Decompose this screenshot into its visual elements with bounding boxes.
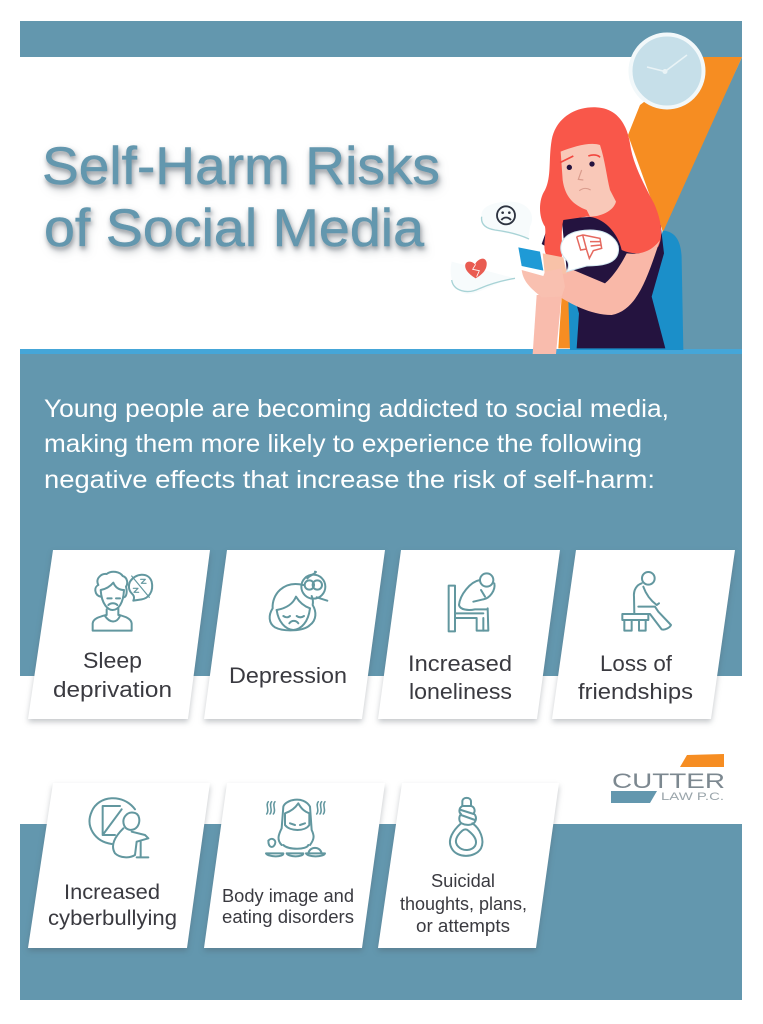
header panel: white: [20, 57, 742, 350]
logo: Cutter Law P.C.: CUTTER: [612, 770, 725, 793]
thumbs down icon: [577, 235, 602, 258]
label: Increased: [408, 651, 512, 676]
label: Sleep: [83, 648, 142, 673]
card: increased cyberbullying: [28, 783, 210, 948]
card: body image and eating disorders: [204, 783, 385, 948]
card: sleep deprivation: [28, 550, 210, 719]
label: thoughts, plans,: [400, 894, 527, 914]
card: loss of friendships: [552, 550, 735, 719]
label: [400, 871, 527, 936]
illustration: sad girl with phone: [451, 107, 683, 354]
label: cyberbullying: [48, 907, 177, 930]
logo: Cutter Law P.C.: [611, 754, 725, 803]
eyes: [567, 165, 572, 170]
intro paragraph: [44, 395, 669, 494]
icon: noose: [450, 798, 482, 856]
card: depression: [204, 550, 385, 719]
label: deprivation: [53, 677, 172, 702]
icon: person hunched on chair: [449, 573, 495, 631]
title: [42, 137, 440, 258]
icon: person sitting on bench: [622, 572, 671, 631]
header right teal background: [640, 57, 742, 350]
title: of Social Media: [44, 199, 425, 258]
wrist behind phone: [543, 253, 567, 277]
icon: child with phone: [90, 798, 148, 857]
phone: [518, 247, 543, 271]
sad face bubble: [482, 202, 532, 238]
chair: [568, 231, 683, 350]
orange sliver behind chair: [558, 297, 570, 348]
broken heart icon: [465, 259, 487, 278]
icon: sleepy person: [93, 572, 152, 631]
card: increased loneliness: [378, 550, 560, 719]
arm: [553, 240, 660, 315]
label: friendships: [578, 679, 693, 704]
intro paragraph: Young people are becoming addicted to social media,: [44, 395, 669, 423]
main teal panel lower: [20, 824, 742, 1000]
label: [48, 881, 177, 930]
shirt: [562, 205, 665, 348]
label: Suicidal: [431, 871, 495, 891]
card: suicidal thoughts: [378, 783, 559, 948]
broken heart bubble: [451, 262, 515, 294]
label: eating disorders: [222, 907, 354, 927]
label: Depression: [229, 663, 347, 688]
label: [53, 648, 172, 702]
other forearm: [533, 295, 562, 354]
main teal panel upper: [20, 354, 742, 676]
title: Self-Harm Risks: [42, 137, 440, 196]
hair: [540, 107, 661, 257]
label: Loss of: [600, 651, 673, 676]
sad face icon: [497, 206, 515, 224]
hand: [522, 268, 565, 297]
nose and mouth: [578, 170, 591, 191]
shirt sleeve sliver: [542, 230, 547, 247]
label: loneliness: [409, 679, 512, 704]
clock icon: [630, 34, 704, 108]
icon: sad girl with tangled thought: [270, 572, 327, 630]
intro paragraph: making them more likely to experience the following: [44, 430, 642, 458]
intro paragraph: negative effects that increase the risk of self-harm:: [44, 466, 655, 494]
brows: [560, 155, 600, 163]
label: Increased: [64, 881, 160, 904]
label: Body image and: [222, 886, 354, 906]
icon: girl with food: [266, 800, 325, 856]
blue divider: [20, 349, 742, 354]
label: [222, 886, 354, 927]
thumbs down bubble: [561, 230, 619, 272]
logo: Cutter Law P.C.: LAW P.C.: [661, 791, 724, 803]
label: [408, 651, 512, 704]
top teal band: [20, 21, 742, 57]
face and neck: [561, 144, 616, 217]
label: [578, 651, 693, 704]
label: or attempts: [416, 916, 510, 936]
orange slanted shape: [628, 57, 742, 232]
